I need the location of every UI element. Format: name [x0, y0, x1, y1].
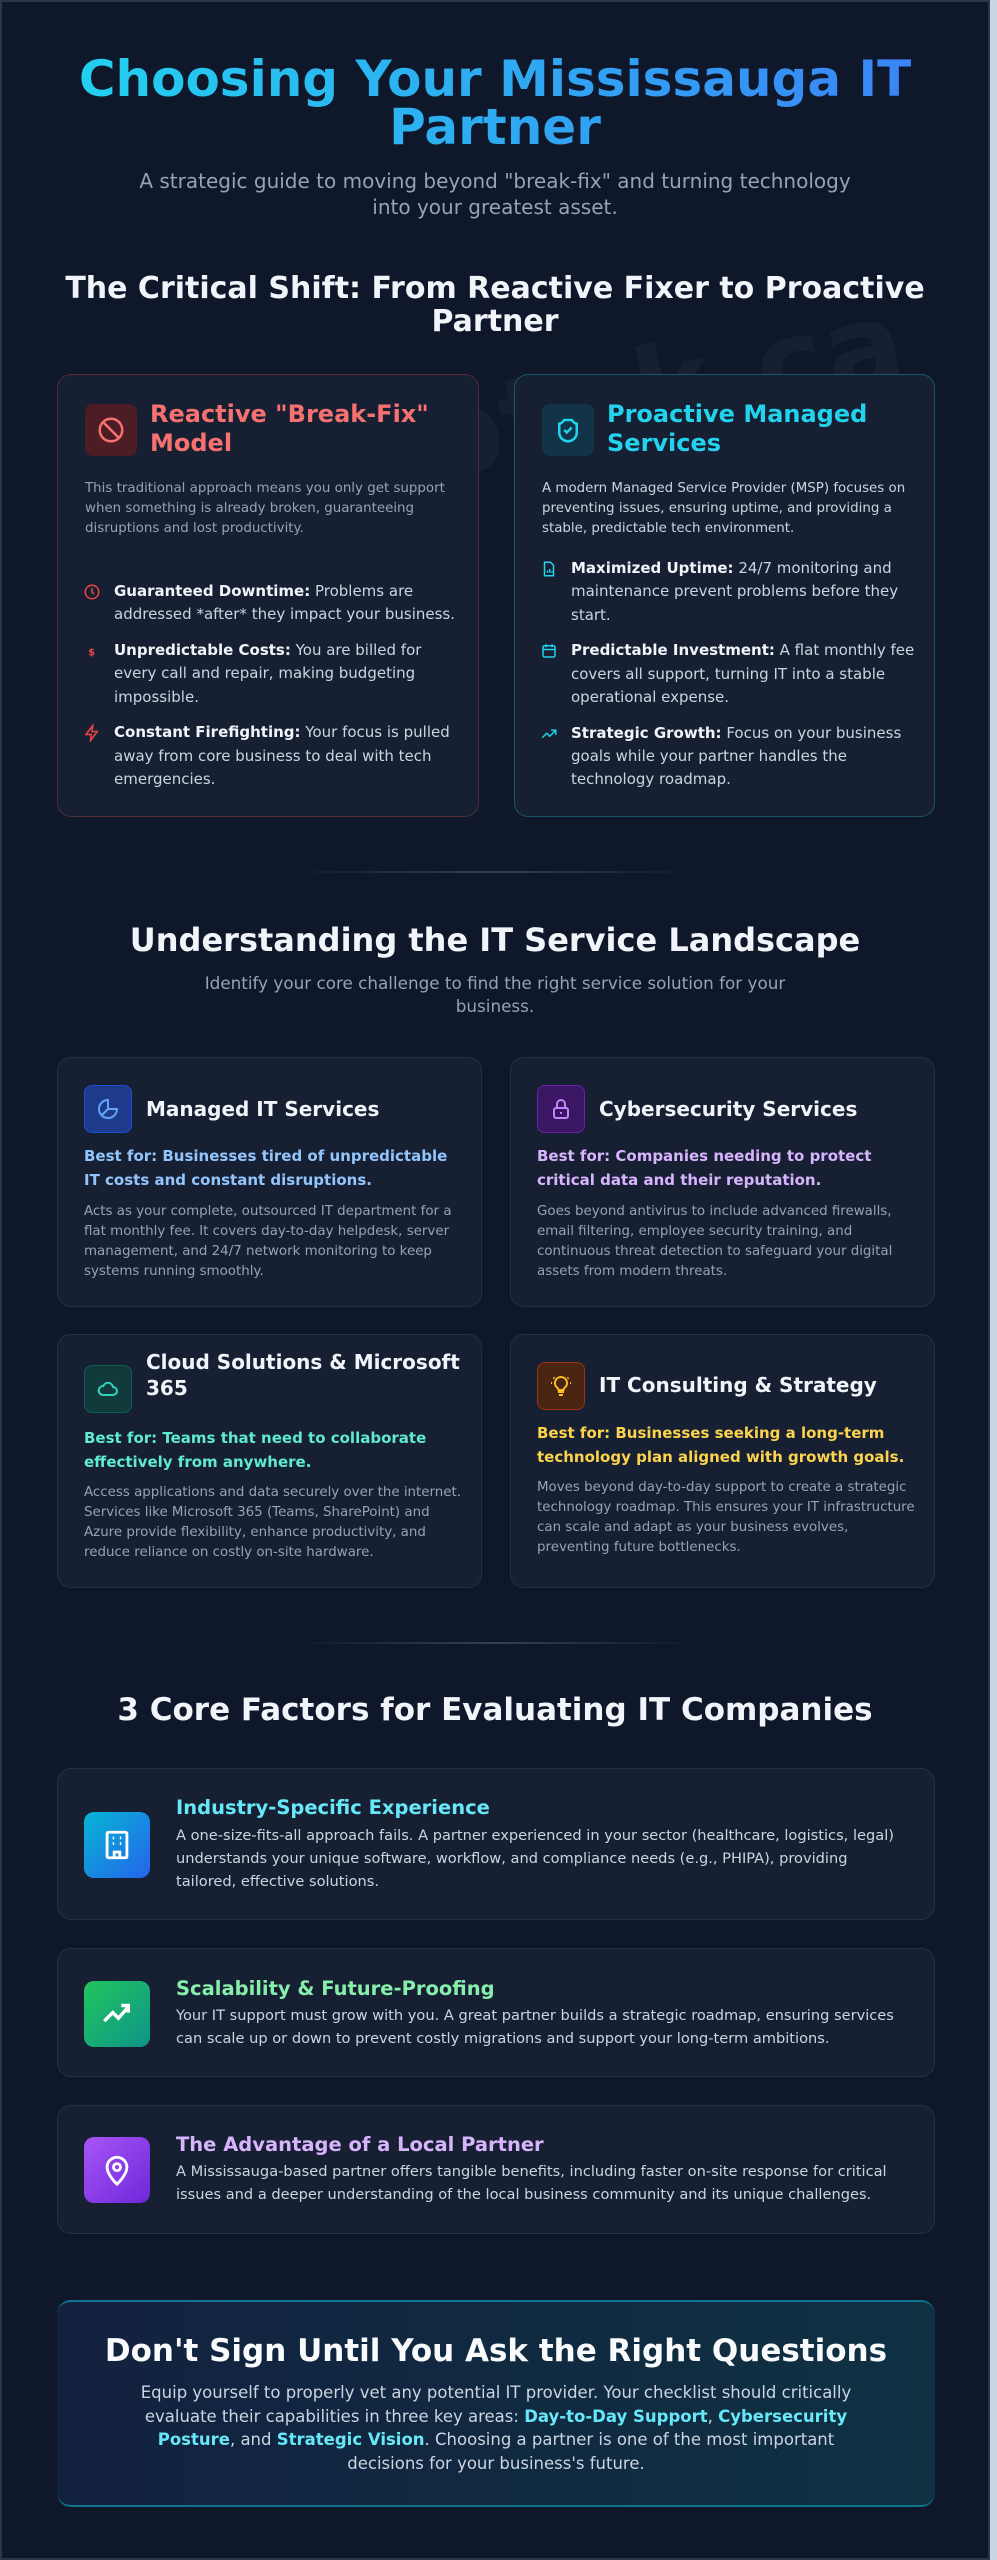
description: Your IT support must grow with you. A great partner builds a strategic roadmap, ensuring services can scale up or down to prevent costly migrations and support your long-term ambitions. [176, 2007, 894, 2047]
icon: lightbulb [537, 1362, 585, 1410]
panel: IT consulting [510, 1334, 935, 1588]
panel: proactive managed services [514, 374, 935, 817]
subtitle: service landscape: Identify your core challenge to find the right service solution for your business. [205, 973, 785, 1016]
icon: prohibited [85, 404, 137, 456]
description: Acts as your complete, outsourced IT department for a flat monthly fee. It covers day-to-day helpdesk, server management, and 24/7 network monitoring to keep systems running smoothly. [84, 1204, 452, 1279]
subtitle: A strategic guide to moving beyond "break-fix" and turning technology into your greatest asset. [139, 169, 851, 219]
best for: Best for: Businesses seeking a long-term technology plan aligned with growth goals. [537, 1424, 904, 1466]
watermark: nanotek.ca [166, 272, 916, 560]
heading: Industry-Specific Experience [176, 1796, 490, 1819]
icon: cloud [84, 1365, 132, 1413]
best for: Best for: Teams that need to collaborate effectively from anywhere. [84, 1429, 426, 1471]
panel: factor scalability [57, 1948, 935, 2077]
callout text: Equip yourself to properly vet any potential IT provider. Your checklist should critically evaluate their capabilities in three key areas: Day-to-Day Support, Cybersecurity Posture, and Strategic Vision. Choosing a partner is one of the most important decisions for your business's future. [141, 2383, 851, 2472]
callout: don't sign [57, 2300, 935, 2507]
heading: Cloud Solutions & Microsoft 365 [146, 1350, 460, 1400]
text: proactive description: A modern Managed Service Provider (MSP) focuses on preventing issues, ensuring uptime, and providing a stable, predictable tech environment. [542, 481, 905, 536]
description: Moves beyond day-to-day support to create a strategic technology roadmap. This ensures your IT infrastructure can scale and adapt as your business evolves, preventing future bottlenecks. [537, 1480, 915, 1555]
heading: service landscape: Understanding the IT Service Landscape [130, 921, 860, 959]
heading: critical shift: The Critical Shift: From Reactive Fixer to Proactive Partner [65, 271, 925, 339]
icon: lock [537, 1085, 585, 1133]
list: proactive benefits: Predictable Investment: A flat monthly fee covers all support, turning IT into a stable operational expense. [571, 641, 914, 706]
list: reactive drawbacks: Guaranteed Downtime: Problems are addressed *after* they impact your business. [114, 582, 455, 623]
panel: factor local partner [57, 2105, 935, 2234]
description: Goes beyond antivirus to include advanced firewalls, email filtering, employee security training, and continuous threat detection to safeguard your digital assets from modern threats. [537, 1204, 892, 1279]
list: reactive drawbacks [84, 582, 455, 788]
description: Access applications and data securely over the internet. Services like Microsoft 365 (Teams, SharePoint) and Azure provide flexibility, enhance productivity, and reduce reliance on costly on-site hardware. [84, 1485, 461, 1560]
panel: managed IT services [57, 1057, 482, 1307]
heading: reactive: Reactive "Break-Fix" Model [150, 400, 429, 457]
heading: Scalability & Future-Proofing [176, 1977, 495, 2000]
icon: trend up [84, 1981, 150, 2047]
icon: map pin [84, 2137, 150, 2203]
panel: cloud solutions [57, 1334, 482, 1588]
panel: reactive break-fix [57, 374, 479, 817]
list: reactive drawbacks: Constant Firefighting: Your focus is pulled away from core business to deal with tech emergencies. [114, 723, 450, 788]
heading: IT Consulting & Strategy [599, 1373, 877, 1397]
best for: Best for: Businesses tired of unpredictable IT costs and constant disruptions. [84, 1147, 447, 1189]
list: proactive benefits: Strategic Growth: Focus on your business goals while your partner handles the technology roadmap. [571, 724, 901, 788]
panel: cybersecurity [510, 1057, 935, 1307]
description: A one-size-fits-all approach fails. A partner experienced in your sector (healthcare, logistics, legal) understands your unique software, workflow, and compliance needs (e.g., PHIPA), providing tailored, effective solutions. [176, 1827, 894, 1890]
callout heading: Don't Sign Until You Ask the Right Questions [105, 2333, 887, 2369]
list: proactive benefits: Maximized Uptime: 24/7 monitoring and maintenance prevent problems before they start. [571, 559, 898, 624]
text: reactive description: This traditional approach means you only get support when something is already broken, guaranteeing disruptions and lost productivity. [85, 481, 445, 536]
icon: building [84, 1812, 150, 1878]
best for: Best for: Companies needing to protect critical data and their reputation. [537, 1147, 871, 1189]
heading: core factors: 3 Core Factors for Evaluating IT Companies [117, 1692, 873, 1728]
description: A Mississauga-based partner offers tangible benefits, including faster on-site response for critical issues and a deeper understanding of the local business community and its unique challenges. [176, 2163, 887, 2203]
list: reactive drawbacks: Unpredictable Costs: You are billed for every call and repair, making budgeting impossible. [114, 641, 421, 706]
heading: The Advantage of a Local Partner [176, 2133, 544, 2156]
list: reactive drawbacks: $ [88, 648, 95, 659]
heading: Managed IT Services [146, 1097, 379, 1121]
heading: proactive: Proactive Managed Services [607, 400, 867, 457]
icon: shield check [542, 404, 594, 456]
title: Choosing Your Mississauga IT Partner [79, 50, 911, 156]
list: proactive benefits [542, 559, 914, 788]
panel: factor industry experience [57, 1768, 935, 1920]
heading: Cybersecurity Services [599, 1097, 857, 1121]
icon: pie chart [84, 1085, 132, 1133]
